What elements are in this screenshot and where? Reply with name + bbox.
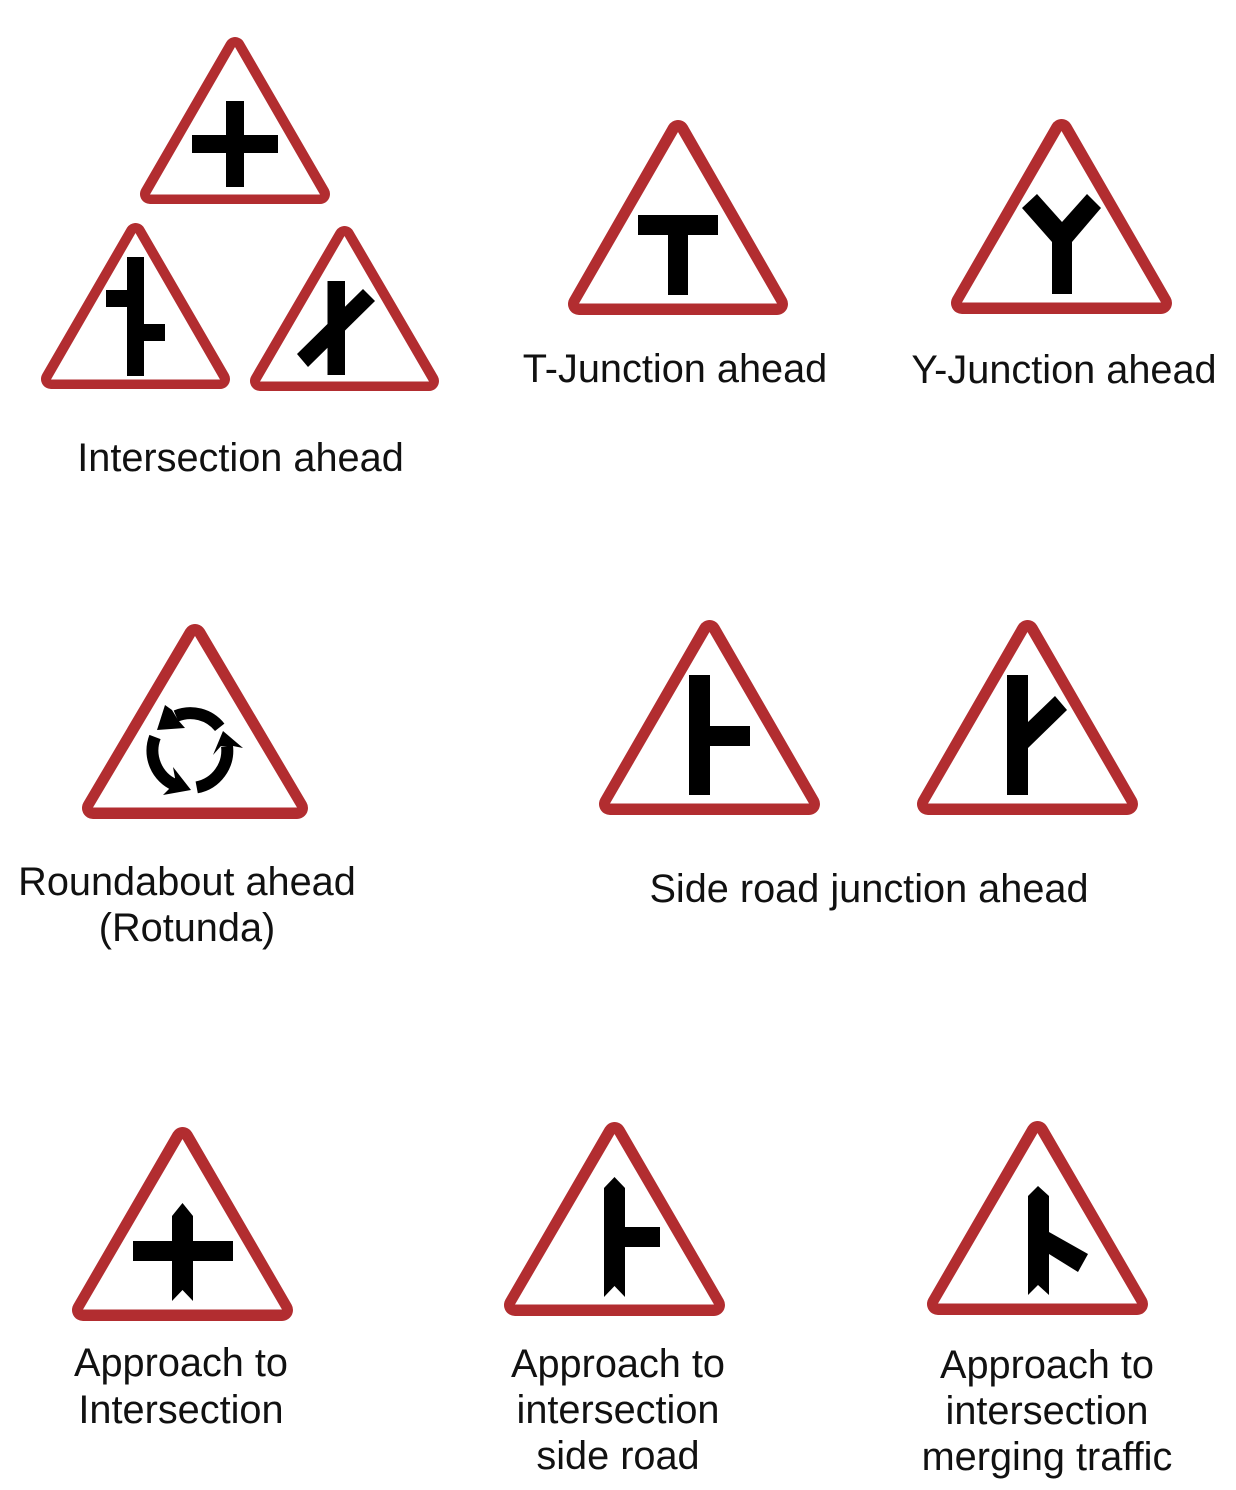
panel: approach to intersection side road — [511, 1133, 725, 1478]
icon: approach to intersection sign — [83, 1138, 282, 1310]
icon: side road right-angle sign — [610, 631, 809, 804]
icon: side road angled sign — [928, 631, 1127, 804]
label: approach to intersection: Approach to — [74, 1341, 288, 1385]
label: approach to intersection side road: side road — [536, 1434, 700, 1478]
icon: roundabout sign — [93, 635, 297, 808]
icon: skewed crossroads sign — [260, 236, 429, 382]
label: roundabout ahead (Rotunda): Roundabout ahead — [18, 860, 356, 904]
panel: roundabout ahead — [18, 635, 356, 950]
icon: circular arrows — [152, 705, 243, 795]
icon: approach merging traffic sign — [938, 1132, 1137, 1304]
icon: staggered crossroads sign — [51, 233, 220, 380]
label: Y-junction ahead: Y-Junction ahead — [911, 348, 1217, 392]
icon: crossroads sign — [150, 47, 320, 194]
label: approach to intersection: Intersection — [78, 1388, 284, 1432]
panel: intersection ahead — [51, 47, 429, 480]
label: approach to intersection — [74, 1341, 288, 1432]
label: T-junction ahead: T-Junction ahead — [523, 347, 827, 391]
icon: approach side road sign — [515, 1133, 714, 1305]
label: roundabout ahead (Rotunda) — [18, 860, 356, 950]
label: roundabout ahead (Rotunda): (Rotunda) — [99, 906, 275, 950]
label: approach to intersection merging traffic: merging traffic — [922, 1435, 1172, 1479]
label: approach to intersection side road: intersection — [517, 1388, 719, 1432]
panel: side road junction ahead — [610, 631, 1127, 911]
label: approach to intersection side road: Approach to — [511, 1342, 725, 1386]
icon: Y-junction sign — [962, 130, 1161, 303]
panel: approach to intersection — [74, 1138, 288, 1432]
label: approach to intersection merging traffic — [922, 1343, 1172, 1479]
panel: T-junction ahead — [523, 131, 827, 391]
label: approach to intersection merging traffic: intersection — [946, 1389, 1148, 1433]
label: intersection ahead: Intersection ahead — [77, 436, 404, 480]
panel: approach to intersection merging traffic — [922, 1132, 1172, 1479]
label: side road junction ahead: Side road junction ahead — [649, 867, 1089, 911]
icon: T-junction sign — [579, 131, 777, 304]
label: approach to intersection side road — [511, 1342, 725, 1478]
panel: Y-junction ahead — [911, 130, 1217, 392]
label: approach to intersection merging traffic: Approach to — [940, 1343, 1154, 1387]
